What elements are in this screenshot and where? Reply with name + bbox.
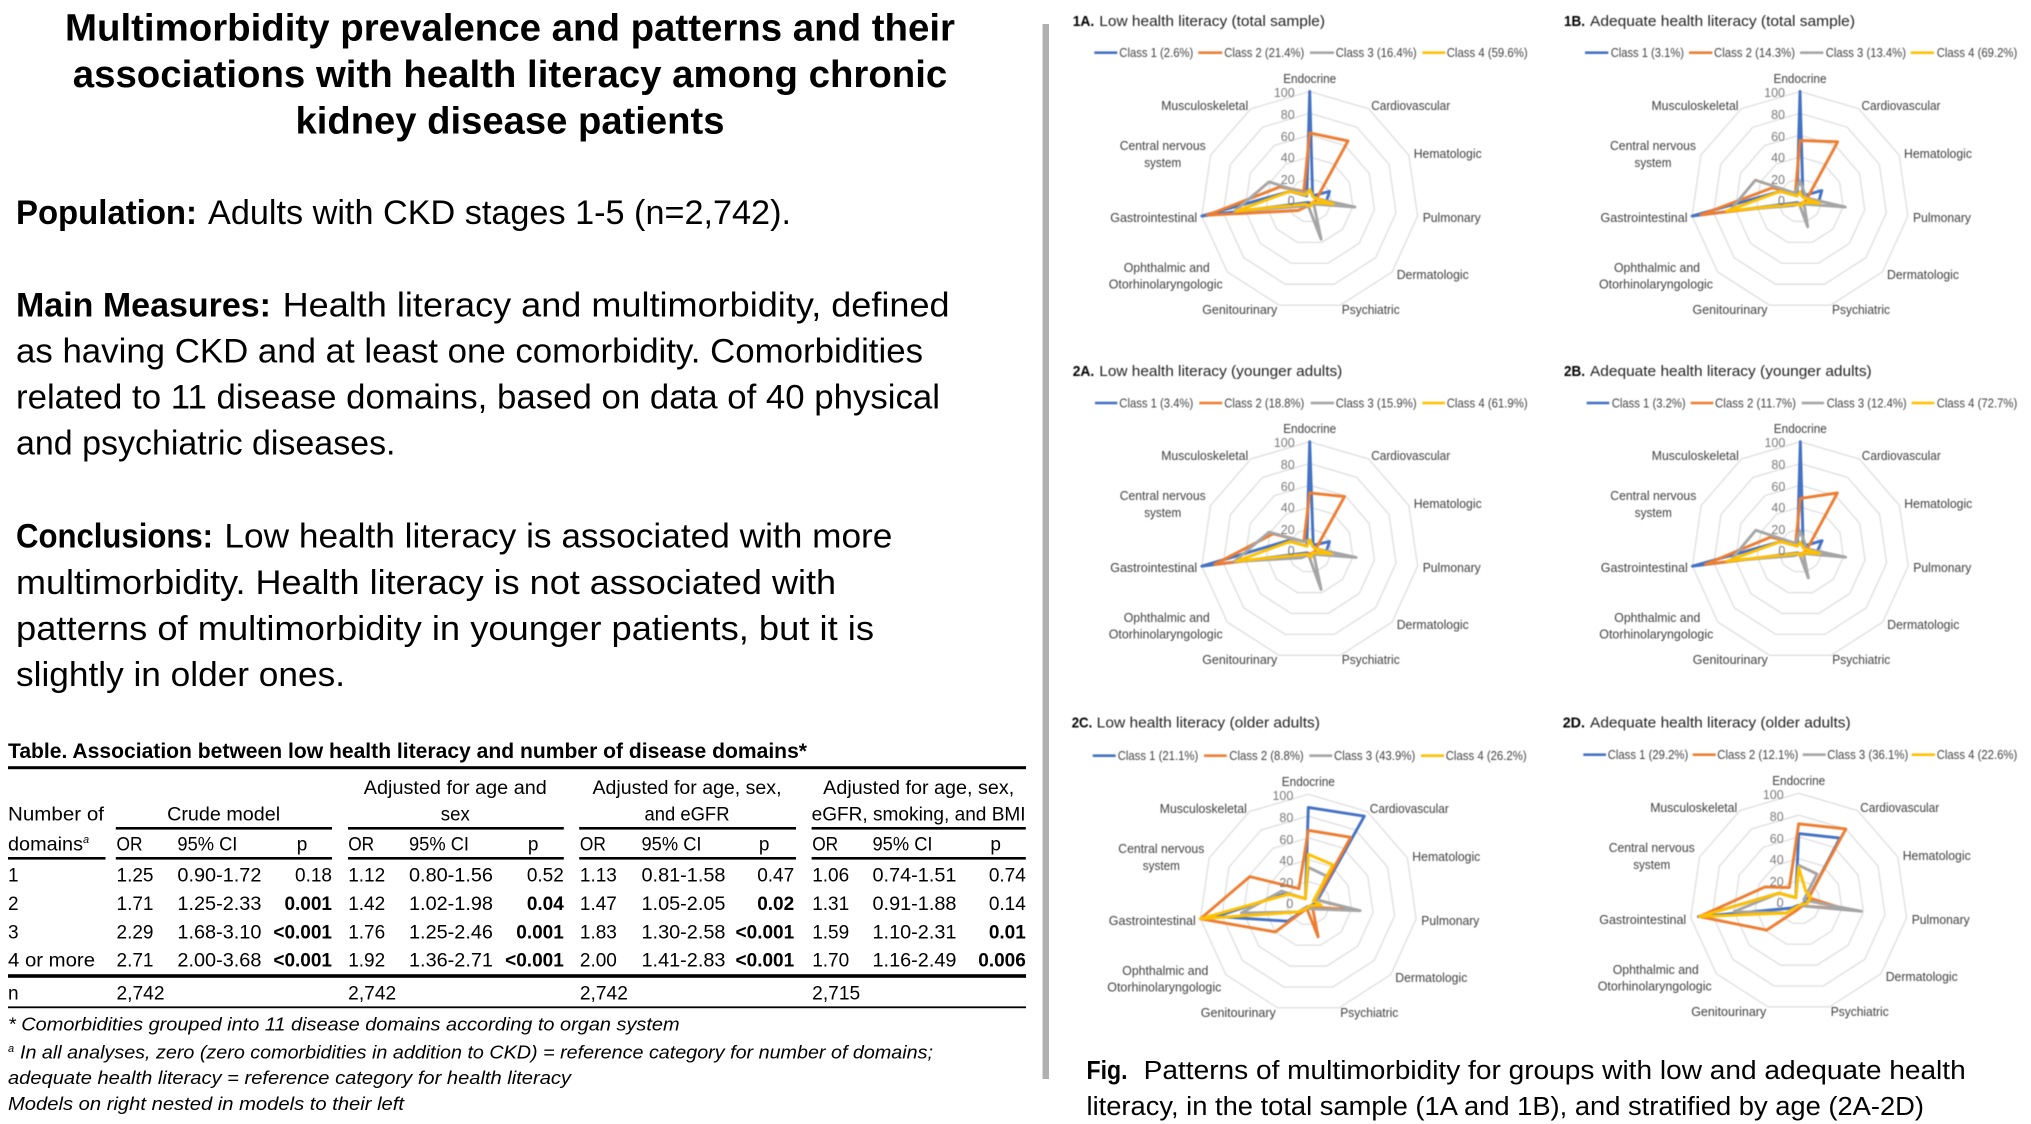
radar chart 1A: 60 [1281, 130, 1295, 144]
radar chart 1B: 20 [1771, 173, 1785, 187]
chart 1A: low health literacy, total sample [1073, 13, 1528, 317]
table row: 3 domains: 1.30-2.58 [642, 923, 726, 944]
table row: 1 domain: 1.25 [116, 866, 153, 887]
radar chart 1A: Pulmonary [1423, 211, 1481, 225]
radar chart 2C: 40 [1279, 854, 1293, 868]
radar chart 1B: Psychiatric [1832, 303, 1890, 317]
radar chart 2A: Genitourinary [1202, 653, 1278, 667]
radar chart 2B: Pulmonary [1913, 561, 1972, 575]
radar chart 1B: 60 [1771, 130, 1785, 144]
legend 2C: Class 3 (43.9%) [1334, 749, 1415, 763]
radar chart 2C: 60 [1279, 833, 1293, 847]
radar chart 2C: Musculoskeletal [1160, 802, 1247, 816]
table column headers: Crude model [167, 805, 280, 826]
legend 2A [1095, 396, 1528, 410]
table row: 3 domains: 2.29 [116, 923, 153, 944]
table row: n: 2,742 [116, 983, 164, 1004]
radar chart 2D: Hematologic [1903, 849, 1971, 863]
radar chart 2B: 60 [1771, 480, 1785, 494]
table row: n [8, 983, 860, 1004]
text block: main measures [16, 287, 950, 462]
radar chart 1B: Central nervous [1610, 139, 1696, 153]
radar chart 2B: 0 [1778, 544, 1785, 558]
table row: 2 domains: 1.05-2.05 [642, 894, 726, 915]
radar chart 2B: Central nervous [1610, 489, 1696, 503]
table column headers: p [528, 835, 538, 856]
radar chart 1B: 100 [1764, 86, 1785, 100]
radar chart 2A: Gastrointestinal [1110, 561, 1197, 575]
text block: main measures: as having CKD and at least one comorbidity. Comorbidities [16, 333, 923, 371]
legend 2D: Class 2 (12.1%) [1717, 748, 1798, 762]
table column headers: OR [812, 835, 838, 856]
table row: 3 domains: 3 [8, 923, 19, 944]
radar chart 1A: Cardiovascular [1371, 99, 1450, 113]
table row: 1 domain: 0.47 [757, 866, 794, 887]
radar chart 2D: Otorhinolaryngologic [1598, 979, 1712, 993]
radar chart 2A: system [1144, 506, 1181, 520]
radar chart 2B: Hematologic [1904, 497, 1972, 511]
table row: 3 domains: 1.10-2.31 [872, 923, 956, 944]
radar chart 2D: Genitourinary [1691, 1005, 1767, 1019]
table row: 3 domains: 1.68-3.10 [177, 923, 261, 944]
radar chart 1A: Genitourinary [1202, 303, 1278, 317]
text block: population: Adults with CKD stages 1-5 (n=2,742). [208, 194, 791, 232]
radar chart 1B: Genitourinary [1692, 303, 1768, 317]
table row: n: 2,742 [580, 983, 628, 1004]
table row: 1 domain: 0.74-1.51 [872, 866, 956, 887]
radar chart 2D: 60 [1770, 832, 1784, 846]
table column headers: domains [8, 835, 83, 856]
radar chart 1A: Hematologic [1414, 147, 1482, 161]
table row: 4 or more domains: 1.92 [348, 951, 385, 972]
radar chart 2D: 0 [1777, 896, 1784, 910]
legend 1B [1585, 46, 2017, 60]
table row: 1 domain: 1 [8, 866, 19, 887]
legend 2C: Class 1 (21.1%) [1118, 749, 1198, 763]
table footnotes: * Comorbidities grouped into 11 disease domains according to organ system [8, 1014, 680, 1035]
table column headers: Number of [8, 805, 105, 826]
table title: Table. Association between low health literacy and number of disease domains* [8, 740, 808, 763]
table row: 3 domains [8, 923, 1026, 944]
table row: n: n [8, 983, 19, 1004]
chart title 2D: Adequate health literacy (older adults) [1590, 715, 1851, 732]
table row: 1 domain: 0.90-1.72 [177, 866, 261, 887]
table row: 4 or more domains: 2.00 [580, 951, 617, 972]
radar chart 2A: Pulmonary [1423, 561, 1481, 575]
text block: conclusions: slightly in older ones. [16, 656, 345, 694]
radar chart 2A: 60 [1281, 480, 1295, 494]
legend 2D: Class 4 (22.6%) [1937, 748, 2017, 762]
radar chart 1A: Endocrine [1283, 72, 1336, 86]
radar chart 2C: Central nervous [1118, 842, 1204, 856]
table row: 4 or more domains: 2.00-3.68 [177, 951, 261, 972]
radar chart 2B: Gastrointestinal [1601, 561, 1688, 575]
table row: 1 domain: 1.12 [348, 866, 385, 887]
figure caption [1086, 1057, 1966, 1121]
radar chart 1B: Ophthalmic and [1614, 261, 1700, 275]
table row: 1 domain: 0.74 [989, 866, 1026, 887]
table column headers: OR [580, 835, 606, 856]
table row: 1 domain: 1.13 [580, 866, 617, 887]
radar chart 2D: 100 [1763, 788, 1784, 802]
chart title 1A: 1A. [1073, 13, 1094, 30]
table row: 1 domain: 0.80-1.56 [409, 866, 493, 887]
chart title 2D: 2D. [1563, 715, 1585, 732]
table row: 1 domain: 0.52 [527, 866, 564, 887]
radar chart 1A: 100 [1274, 86, 1295, 100]
radar chart 2A: 20 [1281, 523, 1295, 537]
radar chart 2D [1598, 774, 1971, 1019]
radar chart 1B: Musculoskeletal [1652, 99, 1738, 113]
table row: 2 domains: 1.71 [116, 894, 153, 915]
radar chart 1A: Psychiatric [1342, 303, 1400, 317]
chart title 2B: 2B. [1564, 363, 1585, 380]
table row: 1 domain: 0.81-1.58 [642, 866, 726, 887]
radar chart 2C: Gastrointestinal [1109, 914, 1196, 928]
legend 1B: Class 4 (69.2%) [1937, 46, 2017, 60]
text block: main measures: related to 11 disease domains, based on data of 40 physical [16, 378, 940, 416]
radar chart 2A: Otorhinolaryngologic [1109, 628, 1223, 642]
table row: 1 domain: 1.06 [812, 866, 849, 887]
table column headers: p [990, 835, 1001, 856]
table footnotes [8, 1014, 933, 1114]
radar chart 2C: Genitourinary [1201, 1006, 1277, 1020]
chart title 1A: Low health literacy (total sample) [1099, 13, 1325, 30]
legend 2A: Class 4 (61.9%) [1447, 396, 1528, 410]
table row: 2 domains: 0.14 [989, 894, 1026, 915]
legend 2C: Class 4 (26.2%) [1446, 749, 1527, 763]
radar chart 1A: Musculoskeletal [1161, 99, 1248, 113]
radar chart 2A: Dermatologic [1397, 618, 1469, 632]
radar chart 2C: 0 [1286, 897, 1293, 911]
table row: n: 2,742 [348, 983, 396, 1004]
radar chart 1B: Endocrine [1774, 72, 1827, 86]
text block: conclusions: patterns of multimorbidity in younger patients, but it is [16, 610, 874, 648]
radar chart 1B: Otorhinolaryngologic [1599, 278, 1713, 292]
table row: 2 domains: 0.001 [284, 894, 332, 915]
chart title 1B: Adequate health literacy (total sample) [1590, 13, 1855, 30]
chart 1B: adequate health literacy, total sample [1564, 13, 2017, 317]
text block: conclusions: Conclusions: [16, 518, 213, 556]
radar chart 2C: Ophthalmic and [1122, 964, 1208, 978]
table column headers: and eGFR [644, 805, 730, 826]
title: Multimorbidity prevalence and patterns and their [65, 8, 955, 50]
radar chart 2D: Psychiatric [1831, 1005, 1889, 1019]
table column headers: p [759, 835, 769, 856]
radar chart 2C: 80 [1279, 811, 1293, 825]
radar chart 2B: Endocrine [1774, 422, 1827, 436]
radar chart 2B: Otorhinolaryngologic [1599, 628, 1713, 642]
table column headers: 95% CI [872, 835, 932, 856]
table row: 4 or more domains: 4 or more [8, 951, 95, 972]
legend 2D: Class 1 (29.2%) [1608, 748, 1688, 762]
table column headers: Adjusted for age, sex, [592, 778, 782, 799]
radar chart 1B: Dermatologic [1887, 268, 1959, 282]
text block: conclusions: multimorbidity. Health literacy is not associated with [16, 564, 836, 602]
radar chart 1A: 40 [1281, 151, 1295, 165]
radar chart 2D: Cardiovascular [1860, 801, 1939, 815]
table row: 2 domains: 1.25-2.33 [177, 894, 261, 915]
text block: main measures: Main Measures: [16, 287, 271, 325]
legend 2A: Class 1 (3.4%) [1119, 396, 1193, 410]
radar chart 1A: Central nervous [1120, 139, 1206, 153]
legend 2A: Class 3 (15.9%) [1336, 396, 1417, 410]
radar chart 2D: Musculoskeletal [1650, 801, 1737, 815]
radar chart 2A: 100 [1274, 436, 1295, 450]
radar chart 2A: Hematologic [1414, 497, 1482, 511]
table row: 4 or more domains: 0.006 [978, 951, 1026, 972]
table row: 2 domains [8, 894, 1026, 915]
chart title 2C: 2C. [1072, 715, 1092, 732]
radar chart 1A: 0 [1288, 194, 1295, 208]
radar chart 1B: system [1634, 156, 1672, 170]
radar chart 2B [1599, 422, 1972, 667]
table row: n: 2,715 [812, 983, 860, 1004]
radar chart 2A: 40 [1281, 501, 1295, 515]
radar chart 2B: 40 [1771, 501, 1785, 515]
legend 2B [1587, 396, 2017, 410]
radar chart 2C: 20 [1279, 876, 1293, 890]
table row: 2 domains: 2 [8, 894, 19, 915]
table footnotes: a [8, 1043, 14, 1055]
legend 1B: Class 3 (13.4%) [1826, 46, 1906, 60]
table row: 1 domain: 0.18 [295, 866, 332, 887]
radar chart 1A: Ophthalmic and [1124, 261, 1210, 275]
table row: 2 domains: 1.02-1.98 [409, 894, 493, 915]
table column headers: Adjusted for age and [364, 778, 547, 799]
table row: 3 domains: 1.59 [812, 923, 849, 944]
chart 2C: low health literacy, older adults [1072, 715, 1527, 1020]
table column headers: OR [348, 835, 374, 856]
table row: 2 domains: 1.31 [812, 894, 849, 915]
legend 1A: Class 2 (21.4%) [1224, 46, 1304, 60]
radar chart 2D: Gastrointestinal [1599, 913, 1686, 927]
chart title 2A: 2A. [1073, 363, 1094, 380]
legend 2B: Class 1 (3.2%) [1612, 396, 1686, 410]
table row: 3 domains: 1.83 [580, 923, 617, 944]
radar chart 1B: 0 [1778, 194, 1785, 208]
table row: 2 domains: 0.02 [757, 894, 794, 915]
chart 2D: adequate health literacy, older adults [1563, 715, 2017, 1019]
radar chart 1A: 80 [1281, 108, 1295, 122]
radar chart 2C: Endocrine [1282, 775, 1335, 789]
radar chart 2C: Otorhinolaryngologic [1107, 980, 1221, 994]
chart 2A: low health literacy, younger adults [1073, 363, 1528, 667]
table footnotes: adequate health literacy = reference category for health literacy [8, 1067, 573, 1088]
radar chart 1B: Pulmonary [1913, 211, 1972, 225]
radar chart 2B: Cardiovascular [1862, 449, 1941, 463]
legend 1A: Class 3 (16.4%) [1336, 46, 1417, 60]
legend 2C [1093, 749, 1527, 763]
radar chart 2B: Musculoskeletal [1652, 449, 1739, 463]
table row: 3 domains: <0.001 [736, 923, 795, 944]
radar chart 2D: Ophthalmic and [1613, 963, 1699, 977]
table row: 3 domains: 1.76 [348, 923, 385, 944]
radar chart 2D: 40 [1770, 853, 1784, 867]
table row: 4 or more domains: <0.001 [273, 951, 332, 972]
radar chart 2B: 80 [1771, 458, 1785, 472]
table row: 3 domains: 1.25-2.46 [409, 923, 493, 944]
radar chart 1A [1109, 72, 1482, 317]
figure caption: Fig. [1086, 1057, 1128, 1085]
table column headers: 95% CI [642, 835, 702, 856]
radar chart 2A: Ophthalmic and [1124, 611, 1210, 625]
radar chart 2A [1109, 422, 1482, 667]
chart title 2B: Adequate health literacy (younger adults) [1590, 363, 1872, 380]
radar chart 2C: 100 [1272, 789, 1293, 803]
table column headers: 95% CI [409, 835, 469, 856]
legend 2A: Class 2 (18.8%) [1224, 396, 1304, 410]
table column headers: eGFR, smoking, and BMI [812, 805, 1026, 826]
radar chart 2A: 0 [1288, 544, 1295, 558]
legend 1B: Class 2 (14.3%) [1714, 46, 1795, 60]
table row: 2 domains: 1.42 [348, 894, 385, 915]
table row: 1 domain [8, 866, 1026, 887]
radar chart 2A: Endocrine [1283, 422, 1336, 436]
radar chart 2B: 100 [1764, 436, 1785, 450]
table row: 4 or more domains: 1.36-2.71 [409, 951, 493, 972]
radar chart 1B [1599, 72, 1972, 317]
radar chart 2D: system [1633, 858, 1670, 872]
chart title 2C: Low health literacy (older adults) [1097, 715, 1320, 732]
radar chart 2B: 20 [1771, 523, 1785, 537]
table row: 4 or more domains: 1.70 [812, 951, 849, 972]
radar chart 2A: Psychiatric [1342, 653, 1400, 667]
table row: 2 domains: 0.91-1.88 [872, 894, 956, 915]
table row: 4 or more domains: 1.41-2.83 [642, 951, 726, 972]
table row: 4 or more domains [8, 951, 1026, 972]
table footnotes: In all analyses, zero (zero comorbidities in addition to CKD) = reference category for number of domains; [20, 1041, 933, 1062]
radar chart 2C: Hematologic [1412, 850, 1480, 864]
radar chart 1A: Otorhinolaryngologic [1109, 278, 1223, 292]
radar chart 2C: Dermatologic [1395, 971, 1467, 985]
legend 1A [1094, 46, 1528, 60]
table column headers: Adjusted for age, sex, [823, 778, 1014, 799]
radar chart 2C: system [1143, 859, 1180, 873]
radar chart 2A: Central nervous [1120, 489, 1206, 503]
radar chart 2B: Ophthalmic and [1614, 611, 1700, 625]
radar chart 2A: Musculoskeletal [1161, 449, 1248, 463]
text block: conclusions [16, 518, 892, 694]
chart title 1B: 1B. [1564, 13, 1585, 30]
radar chart 2A: 80 [1281, 458, 1295, 472]
radar chart 2B: Psychiatric [1832, 653, 1890, 667]
title: kidney disease patients [296, 100, 724, 142]
title: associations with health literacy among chronic [73, 54, 947, 96]
figure caption: literacy, in the total sample (1A and 1B), and stratified by age (2A-2D) [1086, 1093, 1924, 1121]
text block: main measures: Health literacy and multimorbidity, defined [283, 287, 950, 325]
radar chart 2B: Dermatologic [1887, 618, 1959, 632]
radar chart 2C [1107, 775, 1480, 1020]
radar chart 1B: Cardiovascular [1862, 99, 1940, 113]
table column headers: sex [441, 805, 470, 826]
legend 2B: Class 3 (12.4%) [1827, 396, 1907, 410]
text block: main measures: and psychiatric diseases. [16, 424, 396, 462]
radar chart 1A: system [1144, 156, 1181, 170]
legend 2D: Class 3 (36.1%) [1827, 748, 1908, 762]
radar chart 1B: Hematologic [1904, 147, 1972, 161]
figure caption: Patterns of multimorbidity for groups with low and adequate health [1144, 1057, 1966, 1085]
table row: 3 domains: 0.001 [516, 923, 564, 944]
title [65, 8, 955, 142]
table column headers: p [297, 835, 307, 856]
radar chart 2C: Pulmonary [1421, 914, 1480, 928]
radar chart 2C: Cardiovascular [1370, 802, 1449, 816]
panel: table [8, 740, 1026, 1114]
legend 2B: Class 2 (11.7%) [1715, 396, 1796, 410]
table footnotes: Models on right nested in models to their left [8, 1093, 405, 1114]
radar chart 2D: Endocrine [1772, 774, 1825, 788]
text block: population: Population: [16, 194, 197, 232]
chart title 2A: Low health literacy (younger adults) [1099, 363, 1342, 380]
legend 1A: Class 1 (2.6%) [1119, 46, 1193, 60]
radar chart 2C: Psychiatric [1340, 1006, 1398, 1020]
legend 1B: Class 1 (3.1%) [1611, 46, 1684, 60]
table column headers [8, 778, 1026, 860]
radar chart 2D: Central nervous [1609, 841, 1695, 855]
radar chart 2D: 20 [1770, 875, 1784, 889]
table row: 2 domains: 1.47 [580, 894, 617, 915]
legend 2B: Class 4 (72.7%) [1937, 396, 2017, 410]
radar chart 2A: Cardiovascular [1371, 449, 1450, 463]
legend 1A: Class 4 (59.6%) [1447, 46, 1528, 60]
text block: conclusions: Low health literacy is associated with more [224, 518, 892, 556]
table column headers: OR [116, 835, 142, 856]
table row: 2 domains: 0.04 [527, 894, 564, 915]
table row: 4 or more domains: 2.71 [116, 951, 153, 972]
legend 2C: Class 2 (8.8%) [1229, 749, 1304, 763]
radar chart 1A: Dermatologic [1397, 268, 1469, 282]
radar chart 1A: Gastrointestinal [1110, 211, 1197, 225]
table row: 4 or more domains: 1.16-2.49 [872, 951, 956, 972]
table column headers: a [83, 834, 89, 846]
radar chart 2D: Dermatologic [1886, 970, 1958, 984]
radar chart 2D: Pulmonary [1912, 913, 1970, 927]
radar chart 2B: Genitourinary [1693, 653, 1769, 667]
table column headers: 95% CI [177, 835, 237, 856]
table row: 3 domains: <0.001 [273, 923, 332, 944]
radar chart 1B: 80 [1771, 108, 1785, 122]
radar chart 2B: system [1635, 506, 1672, 520]
radar chart 1B: Gastrointestinal [1600, 211, 1688, 225]
legend 2D [1583, 748, 2017, 762]
radar chart 1A: 20 [1281, 173, 1295, 187]
radar chart 2D: 80 [1770, 810, 1784, 824]
table row: 3 domains: 0.01 [989, 923, 1026, 944]
table row: 4 or more domains: <0.001 [505, 951, 564, 972]
radar chart 1B: 40 [1771, 151, 1785, 165]
chart 2B: adequate health literacy, younger adults [1564, 363, 2017, 667]
table row: 4 or more domains: <0.001 [736, 951, 795, 972]
